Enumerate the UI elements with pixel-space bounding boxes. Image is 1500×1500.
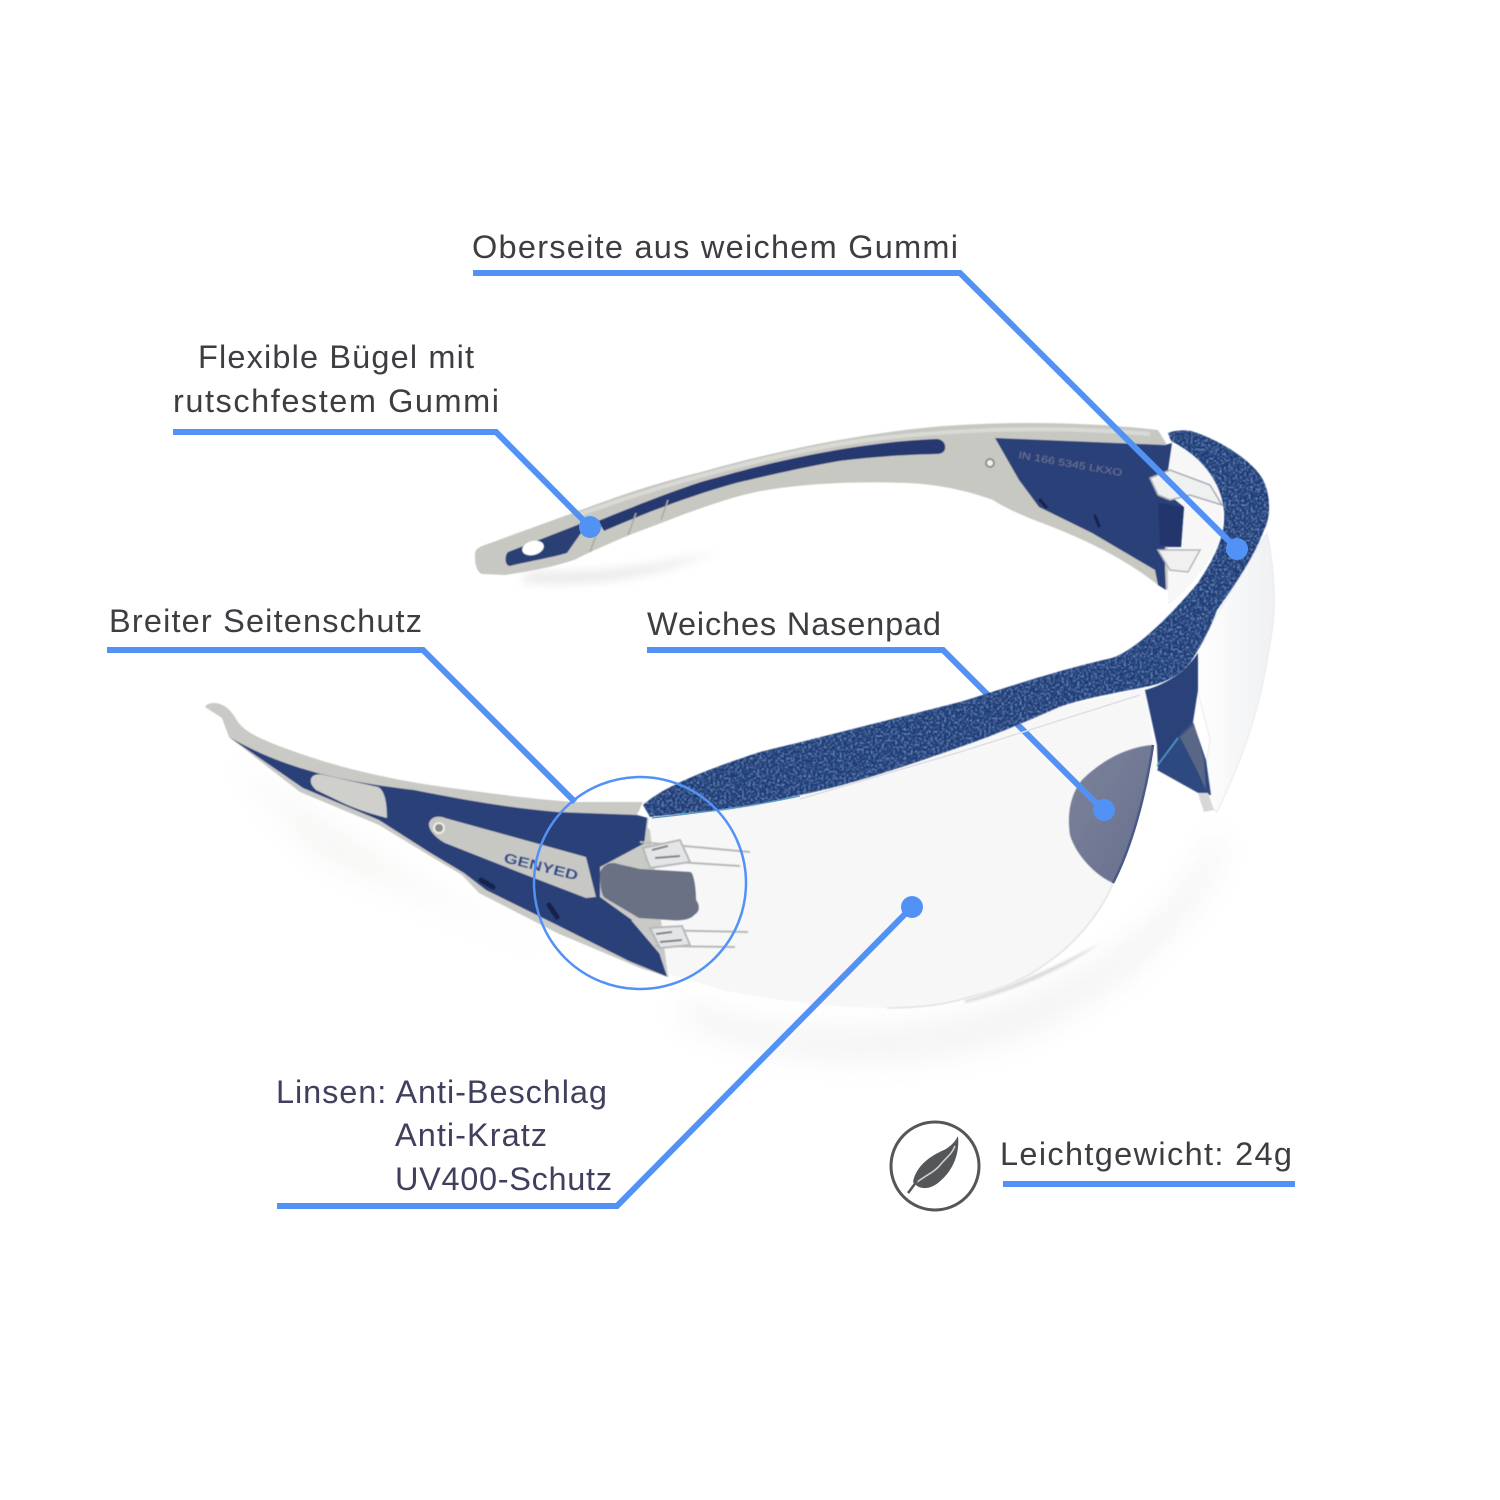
temple tip pad — [506, 520, 590, 566]
leader dot: nose pad — [1093, 799, 1115, 821]
top foam bar — [643, 430, 1269, 817]
underline: weight — [1003, 1181, 1295, 1187]
foam lower rim — [652, 796, 800, 818]
plate holes — [1040, 500, 1099, 526]
left temple grey — [205, 703, 668, 977]
nose tint outer edge — [1113, 745, 1153, 883]
plate print: IN 166 5345 LKXO — [1017, 450, 1123, 479]
vents — [481, 880, 557, 917]
label: side shield: Breiter Seitenschutz — [109, 603, 422, 639]
callout circle — [534, 777, 746, 989]
highlight on temple edge — [581, 429, 1150, 514]
label: top rubber: Oberseite aus weichem Gummi — [472, 229, 958, 265]
logo text: GENYED — [502, 849, 580, 883]
temple groove — [598, 439, 945, 531]
temple tip hole — [521, 538, 545, 558]
icon: feather — [891, 1122, 979, 1210]
label: temples: rutschfestem Gummi — [173, 383, 499, 419]
right lens — [1190, 533, 1274, 812]
label: temples — [173, 339, 499, 419]
lens inner edge — [632, 818, 668, 977]
left temple navy — [229, 737, 668, 977]
temple body grey — [475, 423, 1168, 590]
label: temples: Flexible Bügel mit — [198, 339, 474, 375]
shadows under glasses — [230, 550, 1225, 1061]
leader: lenses — [277, 896, 923, 1206]
grey slider — [311, 774, 387, 818]
inner right lens area — [1165, 445, 1222, 605]
clear hinge top — [1150, 470, 1222, 505]
nose tint — [1069, 745, 1153, 883]
label: lenses — [276, 1074, 612, 1197]
left temple — [205, 703, 750, 977]
leader: top rubber — [473, 273, 1248, 560]
leader line: nose pad — [647, 650, 1104, 811]
leader: temple — [173, 432, 601, 538]
main lens — [648, 688, 1155, 1008]
plate hole — [434, 823, 444, 833]
label: lenses: UV400-Schutz — [395, 1161, 612, 1197]
left hinge grey — [600, 863, 699, 920]
grey screw hole — [986, 459, 994, 467]
temple ribs — [590, 500, 668, 552]
rear temple — [475, 423, 1222, 590]
highlight strip under foam — [800, 695, 1140, 799]
leader: side shield — [107, 650, 575, 802]
label: nose pad: Weiches Nasenpad — [647, 606, 941, 642]
label: weight: Leichtgewicht: 24g — [1000, 1136, 1292, 1172]
logo plate — [429, 817, 596, 898]
label: lenses: Linsen: Anti-Beschlag — [276, 1074, 607, 1110]
clear hinge bottom — [1158, 550, 1200, 572]
clear hinge — [640, 840, 750, 948]
label: lenses: Anti-Kratz — [395, 1117, 547, 1153]
plate hinge shade — [1158, 503, 1184, 547]
rear navy plate — [995, 438, 1184, 590]
nose pad navy — [1145, 653, 1214, 812]
